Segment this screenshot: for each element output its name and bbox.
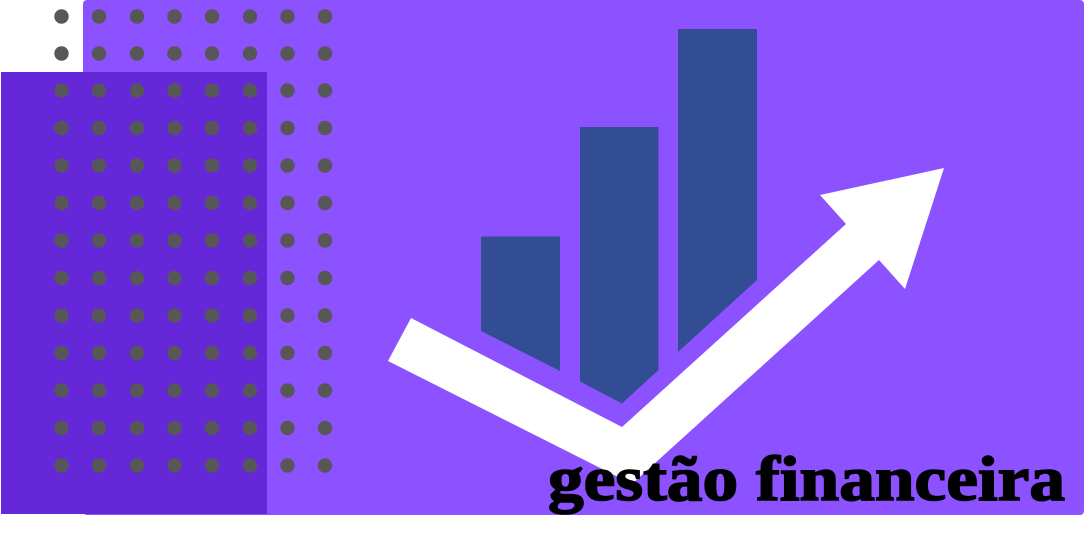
bar: medium <box>580 127 658 404</box>
bar: tall <box>678 29 757 352</box>
bar: short <box>481 236 560 371</box>
arrow: rising trend <box>388 168 944 484</box>
bar chart icon <box>481 29 757 404</box>
dot grid <box>54 9 332 473</box>
title: gestão financeira <box>548 444 1065 514</box>
panel: dark purple block <box>1 72 267 514</box>
